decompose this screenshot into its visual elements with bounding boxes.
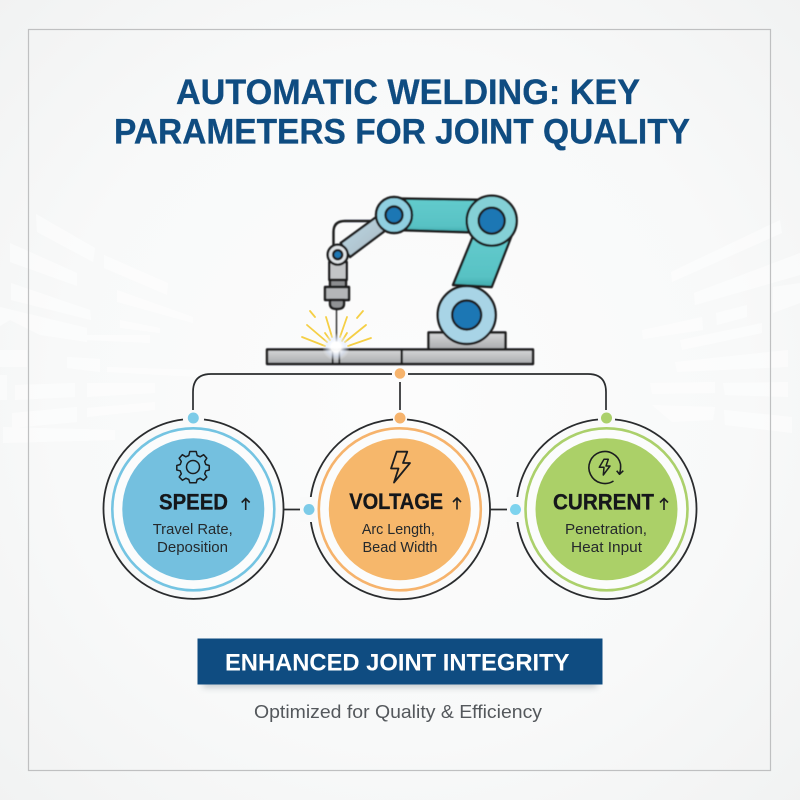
title: AUTOMATIC WELDING: KEY — [176, 72, 640, 112]
label: voltage: VOLTAGE — [349, 489, 443, 514]
shoulder joint — [376, 197, 412, 233]
description: current: Heat Input — [571, 539, 643, 556]
label: current: CURRENT — [553, 490, 655, 514]
description: speed: Deposition — [157, 539, 228, 556]
label: speed: SPEED — [159, 490, 228, 514]
torch body — [325, 262, 349, 342]
description: voltage: Bead Width — [362, 539, 438, 556]
cable — [334, 221, 372, 246]
description: speed: Travel Rate, — [153, 521, 233, 538]
wrist joint — [328, 245, 348, 265]
title — [114, 72, 690, 152]
background light streaks left — [0, 214, 200, 443]
connector dot: speed to voltage — [300, 497, 315, 522]
welding sparks — [302, 311, 371, 346]
banner — [198, 638, 602, 687]
description: speed — [153, 521, 233, 556]
description: voltage — [362, 521, 438, 556]
banner: ENHANCED JOINT INTEGRITY — [225, 650, 569, 677]
forearm — [341, 217, 386, 257]
panel: current — [516, 412, 696, 599]
background light streaks right — [642, 220, 800, 433]
icon: up arrow — [453, 498, 461, 510]
connector dot: voltage to current — [507, 497, 522, 522]
weld flash — [322, 333, 350, 361]
icon: gear — [177, 452, 209, 483]
description: voltage: Arc Length, — [362, 521, 435, 538]
upper teal arm — [396, 198, 492, 233]
panel: voltage — [310, 412, 490, 599]
base plate — [428, 332, 506, 350]
icon: up arrow — [242, 498, 250, 510]
connector dot: top centre — [395, 368, 405, 379]
icon: up arrow — [660, 498, 668, 510]
panel: speed — [104, 412, 284, 599]
description: current: Penetration, — [565, 521, 647, 538]
elbow joint — [467, 196, 517, 246]
base joint — [438, 286, 496, 344]
connector lines — [193, 374, 606, 510]
workpiece plates — [267, 350, 533, 364]
tagline: Optimized for Quality & Efficiency — [254, 702, 542, 722]
description: current — [565, 521, 647, 556]
icon: bolt in cycle — [589, 452, 623, 484]
lower teal arm — [453, 236, 512, 287]
title: PARAMETERS FOR JOINT QUALITY — [114, 112, 690, 152]
icon: lightning bolt — [391, 452, 410, 482]
robot arm illustration — [267, 196, 533, 364]
